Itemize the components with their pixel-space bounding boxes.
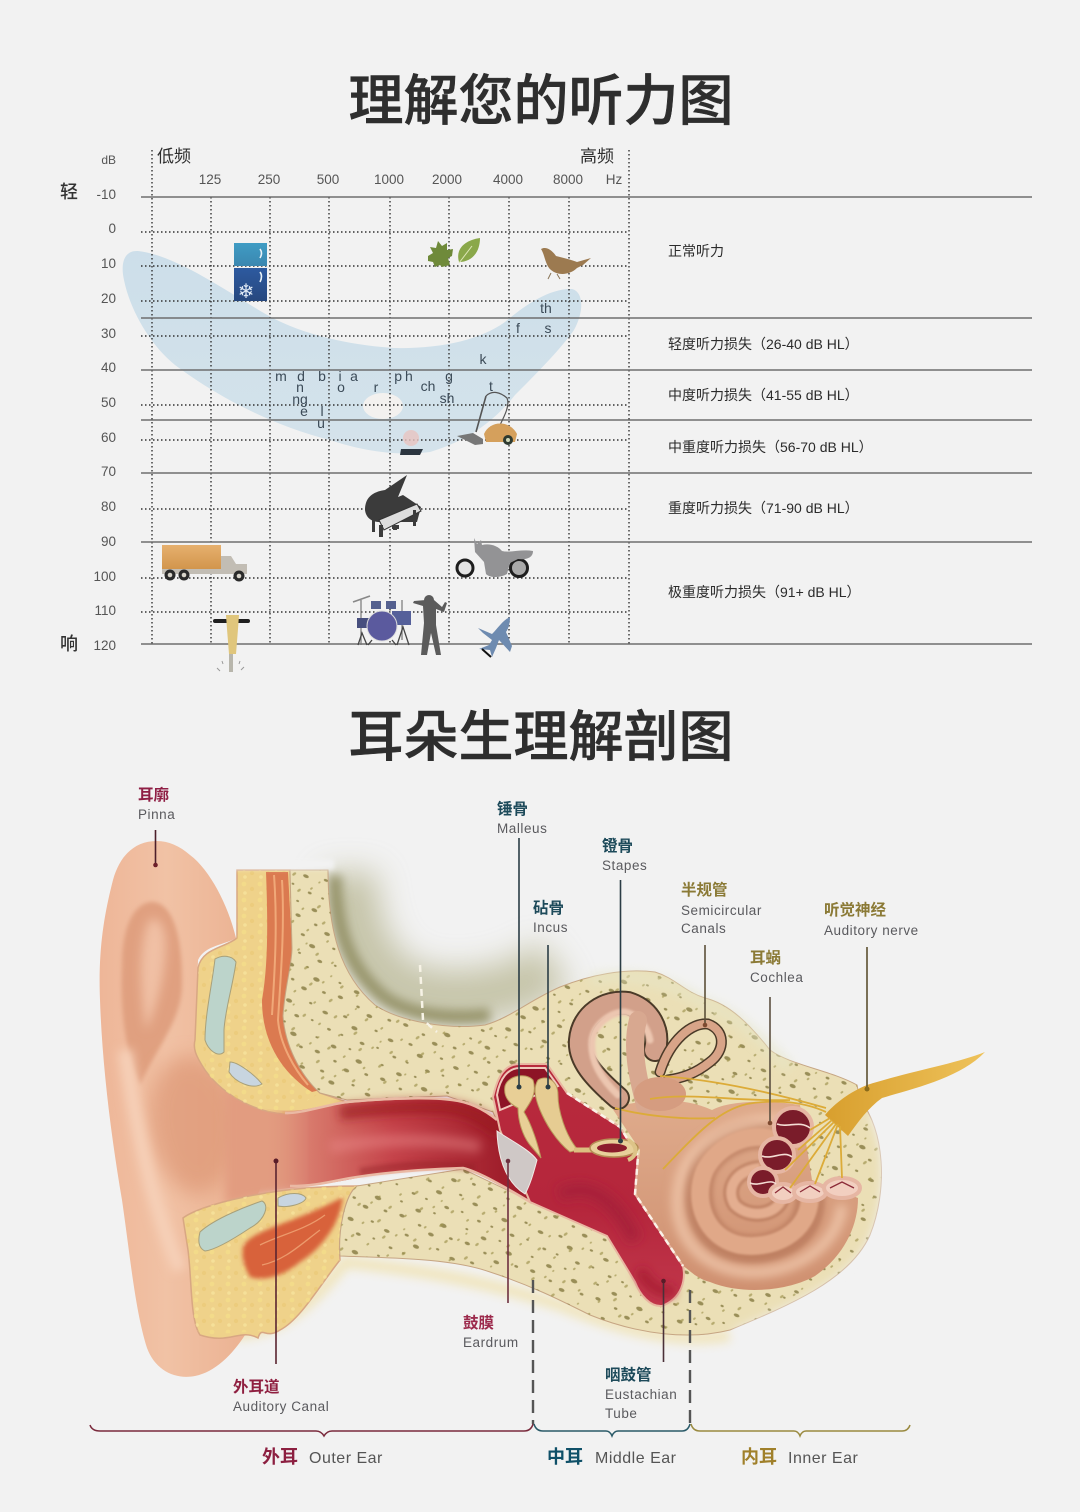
axis: frequency scale: 250 <box>258 172 280 187</box>
speech sounds: k <box>480 351 488 367</box>
eardrum <box>497 1131 537 1194</box>
mild loss: 轻度听力损失（26-40 dB HL） <box>668 336 859 352</box>
fade over bone edges <box>232 864 890 1338</box>
icon: jackhammer <box>213 615 250 672</box>
speech sounds: sh <box>440 390 454 406</box>
semicircular canals <box>580 1003 721 1111</box>
speech sounds: s <box>544 320 552 336</box>
axis: frequency scale: 2000 <box>432 172 462 187</box>
label: semicircular canals: Semicircular <box>681 903 762 918</box>
label: eustachian tube: 咽鼓管 <box>605 1365 652 1384</box>
stapes <box>574 1139 638 1160</box>
axis: decibel scale: 100 <box>93 569 116 584</box>
speech sounds: r <box>374 379 379 395</box>
axis: frequency scale: 125 <box>199 172 221 187</box>
axis: low and high frequency: 高频 <box>580 147 614 166</box>
label: incus <box>533 899 568 1090</box>
icon: truck <box>162 545 247 582</box>
speech banana <box>123 251 581 454</box>
section: outer ear: 外耳 <box>262 1447 298 1467</box>
temporal bone <box>283 870 881 1335</box>
axis: loudness markers: 轻 <box>60 182 78 202</box>
label: incus: 砧骨 <box>533 899 564 917</box>
axis: decibel scale: -10 <box>96 187 116 202</box>
grid lines <box>141 150 1032 645</box>
axis: frequency scale: 500 <box>317 172 339 187</box>
label: eustachian tube <box>605 1279 677 1421</box>
severe loss: 重度听力损失（71-90 dB HL） <box>668 500 859 516</box>
axis: loudness markers <box>60 182 78 654</box>
dashed bone margin <box>420 965 437 1032</box>
auditory canal <box>262 1098 532 1203</box>
axis: low and high frequency: 低频 <box>157 147 191 166</box>
speech sounds: th <box>540 300 552 316</box>
axis: decibel scale: 120 <box>93 638 116 653</box>
speech sounds: ch <box>421 378 435 394</box>
axis: decibel scale: 90 <box>101 534 116 549</box>
label: eustachian tube: Tube <box>605 1406 637 1421</box>
brace: inner ear <box>691 1424 910 1436</box>
title: hearing chart: 理解您的听力图 <box>348 70 734 132</box>
label: auditory canal <box>233 1158 329 1414</box>
canal flesh transition <box>225 1088 310 1205</box>
icon: bird <box>541 248 591 279</box>
speech sounds: l <box>320 403 324 419</box>
label: pinna <box>138 785 175 867</box>
region separators <box>533 1280 690 1424</box>
auditory nerve <box>615 1052 985 1188</box>
section: middle ear: 中耳 <box>547 1447 583 1467</box>
title: ear anatomy: 耳朵生理解剖图 <box>348 706 734 768</box>
axis: decibel scale: 30 <box>101 326 116 341</box>
cochlea and vestibule <box>612 1100 858 1290</box>
axis: frequency scale <box>199 172 622 187</box>
label: cochlea: 耳蜗 <box>750 949 781 967</box>
lower glow <box>200 1262 730 1338</box>
axis: frequency scale: 8000 <box>553 172 583 187</box>
section: outer ear: Outer Ear <box>309 1450 383 1467</box>
label: semicircular canals <box>681 880 762 1027</box>
axis: frequency scale: Hz <box>606 172 622 187</box>
axis: loudness markers: 响 <box>60 634 78 654</box>
axis: decibel scale: 110 <box>94 603 116 618</box>
icon: drum kit <box>353 596 411 645</box>
section: inner ear: Inner Ear <box>788 1450 858 1467</box>
label: malleus: 锤骨 <box>497 800 528 818</box>
malleus <box>505 1076 541 1158</box>
speech sounds: m <box>275 368 287 384</box>
label: cochlea <box>750 949 803 1125</box>
speech sounds: f <box>516 320 520 336</box>
brace: middle ear <box>534 1424 690 1436</box>
section: middle ear: Middle Ear <box>595 1450 677 1467</box>
axis: frequency scale: 1000 <box>374 172 404 187</box>
pinna <box>100 841 290 1377</box>
axis: decibel scale: 60 <box>101 430 116 445</box>
speech sounds: o <box>337 379 345 395</box>
axis: decibel scale: 0 <box>108 221 116 236</box>
label: stapes: 镫骨 <box>602 837 633 855</box>
incus <box>535 1078 578 1152</box>
axis: decibel scale: 40 <box>101 360 116 375</box>
profound loss: 极重度听力损失（91+ dB HL） <box>668 584 861 600</box>
icon: vacuum cleaner <box>457 392 517 445</box>
head shadow <box>335 872 555 1017</box>
axis: decibel scale: 70 <box>101 464 116 479</box>
label: eardrum: 鼓膜 <box>463 1313 494 1332</box>
speech sounds: n <box>296 379 304 395</box>
speech sounds: u <box>317 415 325 431</box>
speech sounds: t <box>489 378 493 394</box>
label: semicircular canals: 半规管 <box>681 880 728 899</box>
icon: voice/speaker <box>400 430 423 455</box>
label: eardrum <box>463 1159 519 1350</box>
section: inner ear: 内耳 <box>741 1447 777 1467</box>
label: semicircular canals: Canals <box>681 921 726 936</box>
label: pinna: 耳廓 <box>138 785 170 804</box>
brace: outer ear <box>90 1424 533 1436</box>
label: auditory nerve <box>824 901 919 1092</box>
speech sounds: b <box>318 368 326 384</box>
label: auditory nerve: Auditory nerve <box>824 923 919 938</box>
label: auditory canal: Auditory Canal <box>233 1399 329 1414</box>
icon: grand piano <box>365 475 421 537</box>
ear anatomy illustration <box>100 841 985 1377</box>
label: eustachian tube: Eustachian <box>605 1387 677 1402</box>
axis: decibel scale: 20 <box>101 291 116 306</box>
icon: airplane <box>478 617 512 657</box>
section: inner ear <box>741 1447 858 1467</box>
icon: refrigerator: ❄ <box>238 279 254 303</box>
attic chamber <box>497 1068 558 1110</box>
speech sounds: d <box>297 368 305 384</box>
cochlear cross-sections <box>749 1108 860 1202</box>
moderately severe loss: 中重度听力损失（56-70 dB HL） <box>668 439 873 455</box>
label: malleus <box>497 800 547 1090</box>
label: cochlea: Cochlea <box>750 970 803 985</box>
speech sounds: ph <box>394 368 416 384</box>
label: stapes: Stapes <box>602 858 647 873</box>
axis: low and high frequency <box>157 147 614 166</box>
axis: decibel scale: 50 <box>101 395 116 410</box>
speech sounds: i <box>338 368 342 384</box>
section: middle ear <box>547 1447 677 1467</box>
label: incus: Incus <box>533 920 568 935</box>
label: pinna: Pinna <box>138 807 175 822</box>
section: outer ear <box>262 1447 383 1467</box>
icon: refrigerator <box>234 243 267 303</box>
hearing loss levels <box>668 243 873 600</box>
axis: decibel scale: 10 <box>101 256 116 271</box>
label: eardrum: Eardrum <box>463 1335 519 1350</box>
moderate loss: 中度听力损失（41-55 dB HL） <box>668 387 859 403</box>
label: stapes <box>602 837 647 1144</box>
label: malleus: Malleus <box>497 821 547 836</box>
axis: decibel scale: 80 <box>101 499 116 514</box>
axis: decibel scale <box>93 153 116 653</box>
icon: motorcycle <box>457 538 533 577</box>
icon: singer <box>413 595 447 655</box>
label: auditory canal: 外耳道 <box>233 1377 280 1396</box>
audiogram chart <box>60 147 1032 672</box>
speech sounds: ng <box>292 391 308 407</box>
lower soft tissue <box>183 1186 357 1338</box>
speech banana highlight <box>363 393 403 419</box>
axis: decibel scale: dB <box>101 153 116 167</box>
upper soft tissue <box>194 870 347 1114</box>
normal hearing: 正常听力 <box>668 243 724 259</box>
speech sounds: g <box>445 368 453 384</box>
speech sounds: e <box>300 403 308 419</box>
axis: frequency scale: 4000 <box>493 172 523 187</box>
icon: leaves <box>428 238 480 267</box>
speech sounds <box>275 300 552 431</box>
speech sounds: a <box>350 368 358 384</box>
middle ear cavity <box>493 1064 684 1306</box>
label: auditory nerve: 听觉神经 <box>824 901 887 919</box>
